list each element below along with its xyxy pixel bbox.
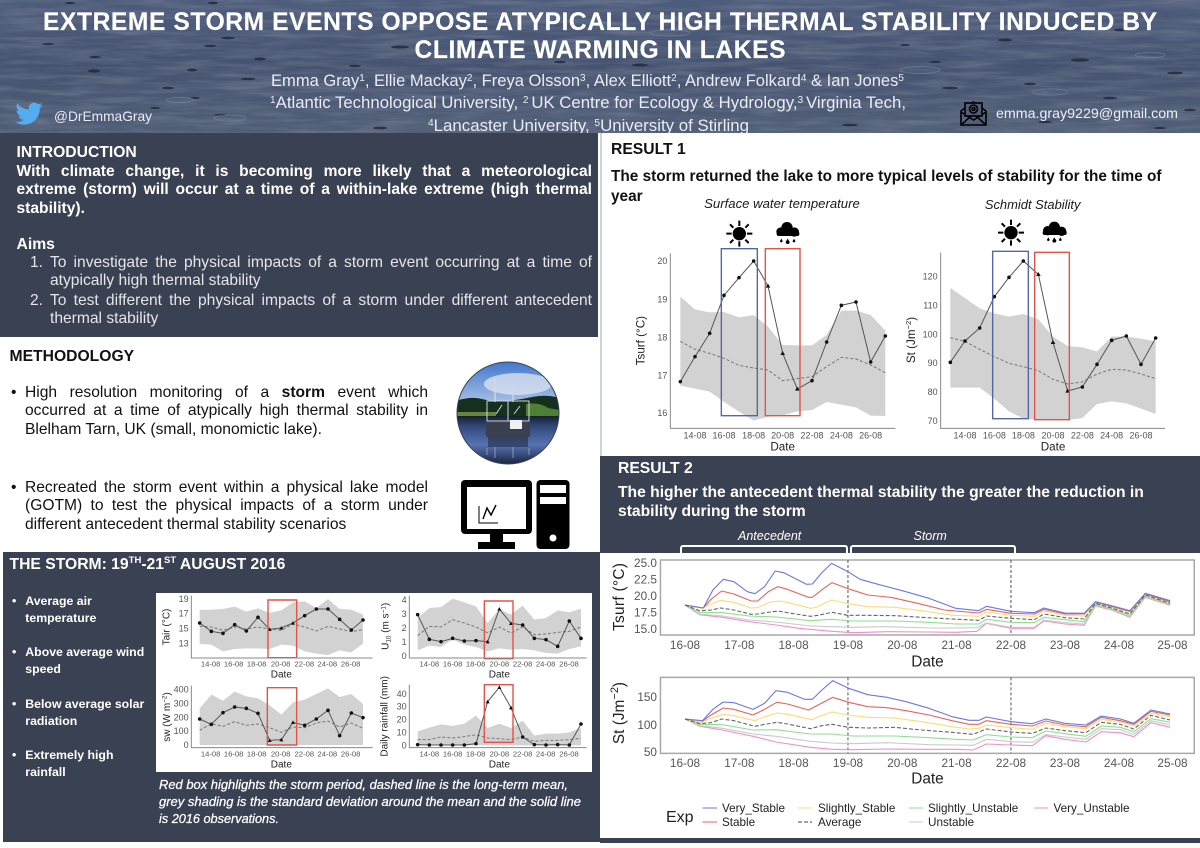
bullet: wind speed: Above average wind	[25, 644, 144, 658]
chart: daily rainfall: 24-08	[536, 749, 555, 758]
chart: daily rainfall: Daily rainfall (mm)	[379, 676, 390, 757]
chart: wind speed: 1	[402, 637, 407, 647]
chart: air temperature: 14-08	[201, 660, 220, 669]
chart: daily rainfall: 16-08	[443, 749, 462, 758]
authors and affiliations: 5	[898, 73, 904, 84]
result 1 heading: RESULT 1	[611, 141, 686, 158]
chart: wind speed: −1	[380, 606, 387, 613]
chart: daily rainfall: 18-08	[466, 749, 485, 758]
legend: Exp	[666, 809, 694, 826]
legend: Average	[818, 816, 861, 829]
chart: wind speed: (m s	[381, 613, 392, 636]
chart: solar radiation: 20-08	[271, 749, 290, 758]
chart: surface water temperature: 17	[657, 370, 667, 380]
chart: surface temperature scenarios: 16-08	[670, 638, 701, 652]
storm weather charts	[156, 593, 592, 772]
bullet: rainfall: rainfall	[25, 764, 66, 778]
authors and affiliations: 1	[359, 73, 365, 84]
authors and affiliations: & Ian Jones	[806, 72, 898, 90]
chart: surface temperature scenarios: 24-08	[1104, 638, 1135, 652]
chart: schmidt stability scenarios: 16-08	[670, 756, 701, 770]
chart: solar radiation: )	[162, 692, 173, 696]
icon: rain cloud	[776, 222, 799, 244]
chart: surface water temperature: 18	[657, 332, 667, 342]
chart: wind speed: 10	[386, 635, 393, 643]
chart: wind speed: U	[381, 643, 392, 650]
bracket: antecedent	[680, 529, 848, 553]
authors and affiliations: Virginia Tech,	[806, 94, 906, 112]
chart: schmidt stability scenarios	[609, 677, 1194, 788]
chart: schmidt stability: 16-08	[983, 430, 1006, 440]
chart: wind speed: 26-08	[559, 660, 579, 669]
bracket: antecedent: Antecedent	[738, 529, 801, 543]
bracket: storm: Storm	[914, 529, 947, 543]
result 2 heading: RESULT 2	[618, 460, 693, 476]
chart: wind speed: Date	[489, 670, 510, 681]
icon: sun	[726, 221, 752, 247]
chart: surface water temperature: 19	[657, 294, 667, 304]
chart title: Schmidt Stability	[985, 198, 1081, 212]
chart: schmidt stability: )	[905, 317, 918, 321]
chart: air temperature: 19	[179, 594, 189, 604]
chart: schmidt stability: 22-08	[1071, 430, 1094, 440]
authors and affiliations: 5	[594, 118, 601, 129]
chart: daily rainfall: 14-08	[420, 749, 439, 758]
chart: surface temperature scenarios	[611, 556, 1194, 670]
chart: schmidt stability scenarios: 22-08	[996, 756, 1027, 770]
legend: Very_Stable	[722, 802, 785, 815]
chart: schmidt stability scenarios: Date	[911, 770, 944, 788]
chart: surface temperature scenarios: 20.0	[634, 589, 657, 603]
bullet: air temperature: Average air	[25, 594, 92, 608]
bullet: air temperature: •	[12, 594, 16, 608]
chart: air temperature	[161, 594, 373, 681]
result 2 finding: stability during the storm	[618, 503, 806, 520]
chart: wind speed: 4	[402, 595, 407, 605]
chart: surface temperature scenarios: 20-08	[887, 638, 918, 652]
chart: solar radiation: Date	[271, 759, 292, 770]
chart: daily rainfall: Date	[489, 759, 510, 770]
chart: schmidt stability scenarios: 23-08	[1050, 756, 1081, 770]
chart: solar radiation: 18-08	[247, 749, 266, 758]
panel: introduction	[0, 133, 598, 337]
chart: daily rainfall: 30	[397, 702, 407, 712]
chart: wind speed: 0	[402, 651, 407, 661]
bullet: rainfall	[12, 750, 113, 776]
aims list: To investigate the physical impacts of a storm event occurring at a time of atypically high thermal stability	[50, 254, 592, 289]
chart: surface water temperature: 20	[657, 256, 667, 266]
authors and affiliations: , Andrew Folkard	[677, 72, 801, 90]
authors and affiliations: UK Centre for Ecology & Hydrology,	[531, 94, 798, 112]
chart: solar radiation: 0	[184, 740, 189, 750]
authors and affiliations: Emma Gray	[271, 72, 359, 90]
chart: daily rainfall: 10	[397, 727, 407, 737]
chart: schmidt stability: 14-08	[953, 430, 977, 440]
chart: wind speed	[380, 595, 587, 681]
legend: Unstable	[928, 816, 974, 829]
chart: wind speed: 2	[402, 623, 407, 633]
icon: envelope	[961, 102, 986, 125]
chart: surface water temperature: 26-08	[859, 430, 882, 440]
panel: methodology	[10, 350, 570, 549]
chart: air temperature: Tair (°C)	[161, 609, 172, 645]
chart: schmidt stability: 18-08	[1012, 430, 1035, 440]
chart: schmidt stability: St (Jm	[905, 329, 918, 363]
aims list: To test different the physical impacts of a storm under different antecedent thermal stability	[50, 292, 592, 327]
chart: daily rainfall: 26-08	[559, 749, 579, 758]
chart: air temperature: 24-08	[318, 660, 337, 669]
title: CLIMATE WARMING IN LAKES	[414, 37, 786, 64]
aims list	[30, 254, 592, 327]
chart: wind speed: 16-08	[443, 660, 462, 669]
chart: solar radiation: 400	[174, 685, 189, 695]
chart: wind speed: 14-08	[420, 660, 439, 669]
chart: air temperature: 15	[179, 624, 189, 634]
bottom stripe	[600, 838, 1200, 843]
chart: schmidt stability: 100	[923, 329, 938, 339]
introduction text: With climate change, it is becoming more likely that a meteorological	[16, 162, 592, 180]
icon: rain cloud	[1043, 222, 1067, 243]
chart: schmidt stability: 24-08	[1100, 430, 1123, 440]
aims list: 2.	[30, 292, 43, 308]
chart: schmidt stability scenarios: 17-08	[724, 756, 755, 770]
chart: schmidt stability scenarios: 21-08	[942, 756, 972, 770]
chart: surface water temperature: 24-08	[830, 430, 853, 440]
chart: surface water temperature	[634, 197, 896, 453]
authors and affiliations: 2	[523, 95, 531, 106]
chart: schmidt stability: 80	[928, 387, 938, 397]
storm heading: THE STORM: 19TH-21ST AUGUST 2016	[10, 555, 285, 573]
bullet: solar radiation: Below average solar	[25, 696, 144, 710]
authors and affiliations: 1	[270, 95, 276, 106]
chart: surface temperature scenarios: Date	[911, 654, 944, 670]
chart: surface temperature scenarios: 21-08	[942, 638, 972, 652]
chart: surface temperature scenarios: 17-08	[724, 638, 755, 652]
panel: result 2	[600, 456, 1200, 553]
chart: air temperature: 26-08	[341, 660, 360, 669]
chart: schmidt stability scenarios: 24-08	[1104, 756, 1135, 770]
chart: surface temperature scenarios: 25-08	[1157, 638, 1188, 652]
chart caption: Red box highlights the storm period, dashed line is the long-term mean,	[159, 778, 568, 792]
chart: wind speed: )	[381, 603, 392, 606]
legend: Very_Unstable	[1054, 802, 1130, 815]
bullet: wind speed: speed	[25, 662, 61, 676]
aims heading: Aims	[16, 236, 55, 253]
chart: air temperature: 18-08	[247, 660, 266, 669]
chart: schmidt stability scenarios: )	[611, 682, 628, 687]
chart: air temperature: Date	[271, 670, 292, 681]
chart: surface temperature scenarios: 23-08	[1050, 638, 1081, 652]
authors and affiliations	[270, 72, 906, 135]
chart: solar radiation: sw (W m	[162, 703, 173, 742]
chart: schmidt stability scenarios: 50	[644, 745, 657, 759]
chart: surface temperature scenarios: 18-08	[779, 638, 809, 652]
chart: schmidt stability scenarios: 18-08	[779, 756, 809, 770]
chart: air temperature: 16-08	[224, 660, 243, 669]
panel: the storm	[0, 552, 600, 842]
bullet: solar radiation: •	[12, 696, 16, 710]
bullet: solar radiation: radiation	[25, 714, 77, 728]
chart: schmidt stability scenarios: 100	[637, 718, 657, 732]
chart: surface temperature scenarios: 15.0	[634, 622, 657, 636]
aims list: 1.	[30, 254, 43, 270]
chart: schmidt stability	[904, 198, 1165, 453]
chart: air temperature: 22-08	[295, 660, 314, 669]
chart: surface water temperature: 18-08	[742, 430, 765, 440]
legend	[666, 802, 1130, 829]
bullet: lake model: Recreated the storm event within a physical lake model (GOTM) to test the physical impacts of a storm under different antecedent thermal stability scenarios	[25, 478, 428, 533]
authors and affiliations: 2	[671, 73, 677, 84]
chart: air temperature: 20-08	[271, 660, 290, 669]
chart: solar radiation: 16-08	[224, 749, 243, 758]
authors and affiliations: 2	[467, 73, 473, 84]
chart caption	[158, 779, 581, 824]
chart: surface water temperature: Tsurf (°C)	[634, 316, 647, 365]
chart: surface water temperature: 16-08	[712, 430, 736, 440]
introduction heading: INTRODUCTION	[16, 144, 137, 161]
panel: result 2 charts	[600, 553, 1200, 838]
chart: daily rainfall: 20-08	[490, 749, 509, 758]
chart: surface temperature scenarios: 22.5	[634, 572, 657, 586]
chart: daily rainfall: 20	[397, 715, 407, 725]
bullet: storm monitoring: •	[11, 384, 16, 400]
chart: schmidt stability: 110	[923, 300, 938, 310]
bullet: wind speed	[12, 647, 144, 676]
bullet: storm monitoring: High resolution monitoring of a storm event which occurred at a time of atypically high thermal stability in Blelham Tarn, UK (small, monomictic lake).	[25, 384, 428, 438]
chart: solar radiation: 22-08	[295, 749, 314, 758]
icon: computer	[461, 480, 570, 549]
chart: schmidt stability scenarios: St (Jm	[611, 700, 628, 744]
chart caption: grey shading is the standard deviation around the mean and the solid line	[159, 795, 581, 809]
chart: solar radiation: 14-08	[201, 749, 220, 758]
twitter handle: @DrEmmaGray	[54, 108, 152, 124]
result 2 finding	[618, 484, 1144, 520]
chart: wind speed: 3	[402, 609, 407, 619]
icon: sun	[998, 220, 1024, 246]
introduction text: extreme (storm) will occur at a time of a within-lake extreme (high thermal	[16, 181, 592, 198]
chart: wind speed: 24-08	[536, 660, 555, 669]
bullet: wind speed: •	[12, 644, 16, 658]
chart: daily rainfall: 40	[397, 689, 407, 699]
chart caption: is 2016 observations.	[159, 812, 279, 826]
chart: solar radiation: 300	[174, 699, 189, 709]
chart: surface water temperature: 22-08	[800, 430, 824, 440]
chart: wind speed: 18-08	[466, 660, 485, 669]
chart: surface water temperature: 16	[657, 408, 667, 418]
chart: schmidt stability: 26-08	[1129, 430, 1153, 440]
chart: surface temperature scenarios: 22-08	[996, 638, 1027, 652]
bullet: air temperature: temperature	[25, 610, 96, 624]
chart: solar radiation: 100	[174, 726, 189, 736]
bracket: storm	[850, 529, 1016, 553]
authors and affiliations: 3	[580, 73, 586, 84]
chart: surface temperature scenarios: Tsurf (°C)	[611, 563, 628, 631]
bullet: air temperature	[12, 596, 96, 624]
authors and affiliations: 4	[801, 73, 807, 84]
chart: schmidt stability: 20-08	[1041, 430, 1065, 440]
chart: schmidt stability scenarios: 19-08	[833, 756, 864, 770]
chart: solar radiation: 26-08	[341, 749, 360, 758]
chart: surface water temperature: Date	[770, 440, 795, 453]
chart: surface temperature scenarios: 17.5	[634, 606, 657, 620]
bullet: rainfall: •	[12, 748, 16, 762]
icon: lake monitoring platform photo	[456, 362, 560, 464]
chart title: Surface water temperature	[704, 197, 860, 211]
chart: schmidt stability scenarios: −2	[609, 687, 621, 700]
chart: schmidt stability: 120	[923, 272, 938, 282]
chart: solar radiation: 200	[174, 713, 189, 723]
chart: wind speed: 20-08	[490, 660, 509, 669]
chart: schmidt stability: 70	[928, 416, 938, 426]
legend: Slightly_Stable	[818, 802, 895, 815]
legend: Stable	[722, 816, 755, 829]
chart: daily rainfall: 22-08	[513, 749, 532, 758]
bullet: rainfall: Extremely high	[25, 748, 113, 762]
chart: daily rainfall	[379, 676, 587, 770]
authors and affiliations: , Ellie Mackay	[365, 72, 468, 90]
introduction text	[16, 162, 592, 217]
bullet: solar radiation	[12, 699, 144, 725]
authors and affiliations: , Alex Elliott	[586, 72, 672, 90]
result 2 finding: The higher the antecedent thermal stability the greater the reduction in	[618, 484, 1144, 501]
chart: schmidt stability: 90	[928, 358, 938, 368]
authors and affiliations: 3	[798, 95, 806, 106]
methodology heading: METHODOLOGY	[10, 348, 134, 365]
email address: emma.gray9229@gmail.com	[996, 105, 1178, 121]
chart: wind speed: 22-08	[513, 660, 532, 669]
title: EXTREME STORM EVENTS OPPOSE ATYPICALLY HIGH THERMAL STABILITY INDUCED BY	[43, 9, 1157, 36]
icon: twitter bird	[16, 103, 43, 125]
bullet: lake model: •	[11, 478, 16, 496]
header banner	[0, 0, 1200, 133]
chart: schmidt stability scenarios: 20-08	[887, 756, 918, 770]
chart: surface water temperature: 14-08	[683, 430, 707, 440]
title	[43, 9, 1157, 64]
chart: schmidt stability scenarios: 150	[637, 690, 657, 704]
chart: daily rainfall: 0	[402, 740, 407, 750]
chart: schmidt stability scenarios: 25-08	[1157, 756, 1188, 770]
chart: air temperature: 17	[179, 609, 189, 619]
chart: solar radiation: 24-08	[318, 749, 337, 758]
authors and affiliations: 4	[428, 118, 434, 129]
legend: Slightly_Unstable	[928, 802, 1018, 815]
chart: schmidt stability: Date	[1041, 440, 1065, 453]
chart: surface water temperature: 20-08	[771, 430, 794, 440]
authors and affiliations: , Freya Olsson	[472, 72, 580, 90]
result 1 finding: The storm returned the lake to more typical levels of stability for the time of year	[611, 168, 1162, 204]
chart: solar radiation	[162, 685, 373, 770]
chart: schmidt stability: −2	[904, 321, 913, 329]
authors and affiliations: Atlantic Technological University,	[276, 94, 523, 112]
chart: solar radiation: −2	[162, 695, 169, 703]
introduction text: stability).	[16, 200, 85, 217]
panel: result 1	[600, 133, 1200, 456]
chart: air temperature: 13	[179, 638, 189, 648]
chart: surface temperature scenarios: 19-08	[833, 638, 864, 652]
chart: surface temperature scenarios: 25.0	[634, 556, 657, 570]
